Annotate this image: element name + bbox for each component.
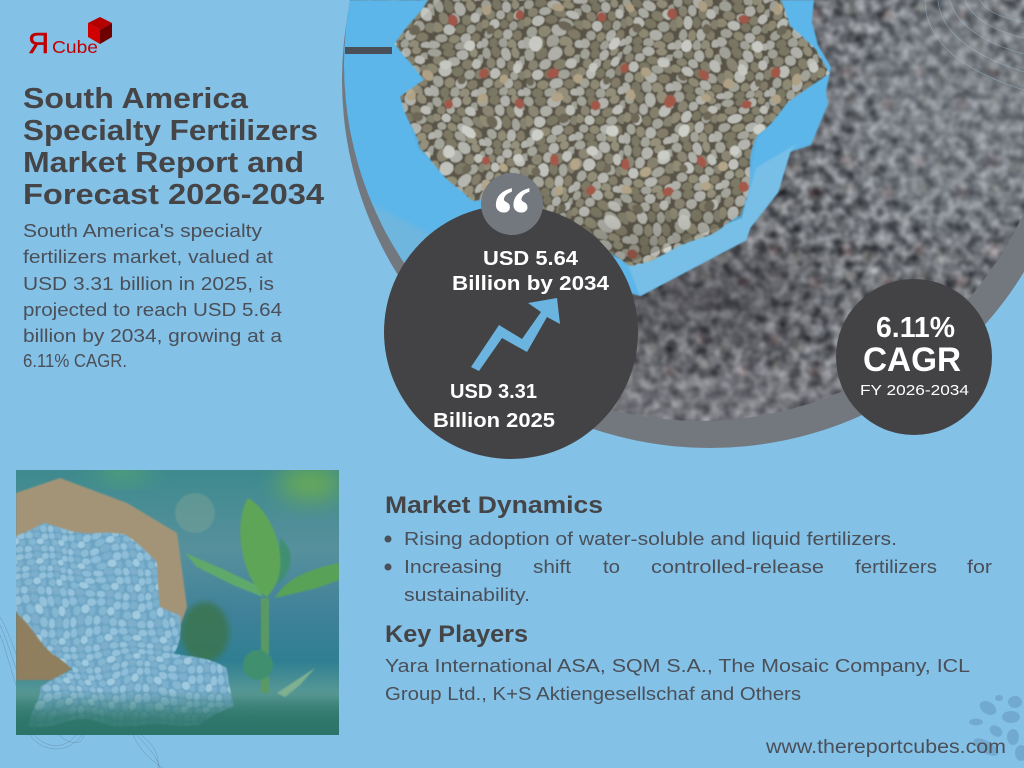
blue glove <box>330 0 831 296</box>
value 2025 <box>433 381 555 432</box>
quote badge <box>481 172 543 260</box>
blurred granules background <box>330 0 1024 440</box>
granule heap <box>397 0 828 263</box>
bullet 1: Rising adoption of water-soluble and liquid fertilizers. <box>404 529 897 549</box>
key players: Key Players <box>385 621 528 648</box>
value 2025: Billion 2025 <box>433 410 555 432</box>
decorative blobs <box>969 695 1024 761</box>
decorative contour lines <box>0 617 163 768</box>
growth arrow <box>471 298 560 371</box>
granules <box>10 518 233 725</box>
intro paragraph: fertilizers market, valued at <box>23 247 273 267</box>
intro paragraph: South America's specialty <box>23 221 262 241</box>
bullet 2: controlled-release <box>651 557 824 577</box>
CAGR circle: CAGR <box>863 341 961 379</box>
quote badge: “ <box>492 172 532 260</box>
intro paragraph: projected to reach USD 5.64 <box>23 300 282 320</box>
paper bag <box>16 477 188 626</box>
key players <box>385 621 970 704</box>
logo wordmark: Я <box>28 28 49 60</box>
intro paragraph <box>23 221 283 371</box>
market dynamics: Market Dynamics <box>385 492 603 519</box>
bullet 2: shift <box>533 557 571 577</box>
CAGR circle: 6.11% <box>876 312 955 344</box>
secondary photo: fertilizer bag and seedling <box>10 460 342 735</box>
logo word Cube: Cube <box>52 37 98 57</box>
bullet 2: fertilizers <box>855 557 937 577</box>
intro paragraph: 6.11% CAGR. <box>23 351 127 371</box>
key players: Group Ltd., K+S Aktiengesellschaf and Others <box>385 684 801 704</box>
seedling <box>185 498 339 697</box>
value 2034 <box>452 248 610 295</box>
title: Market Report and <box>23 147 304 179</box>
grass overlay <box>16 690 339 735</box>
value 2034: Billion by 2034 <box>452 273 610 295</box>
value 2025: USD 3.31 <box>450 381 537 403</box>
logo cube <box>88 17 112 44</box>
main photo: fertilizer granules in gloved hand <box>330 0 1024 440</box>
intro paragraph: billion by 2034, growing at a <box>23 326 283 346</box>
title: Forecast 2026-2034 <box>23 179 324 211</box>
value 2034: USD 5.64 <box>483 248 579 270</box>
faint contour lines top-right <box>925 0 1024 90</box>
title: South America <box>23 83 249 115</box>
bullet 2: Increasing <box>404 557 502 577</box>
website: www.thereportcubes.com <box>765 737 1006 758</box>
title: Specialty Fertilizers <box>23 115 318 147</box>
title <box>23 83 324 211</box>
market value circle <box>384 172 638 459</box>
gray ring behind photo <box>342 0 1024 448</box>
bullet 2 <box>384 557 992 605</box>
CAGR circle <box>836 279 992 435</box>
intro paragraph: USD 3.31 billion in 2025, is <box>23 274 274 294</box>
key players: Yara International ASA, SQM S.A., The Mosaic Company, ICL <box>385 656 970 676</box>
logo <box>28 17 112 60</box>
bullet 2: sustainability. <box>404 585 530 605</box>
market dynamics <box>384 492 992 605</box>
bullet 2: for <box>967 557 992 577</box>
CAGR circle: FY 2026-2034 <box>860 382 969 399</box>
bullet 2: to <box>603 557 620 577</box>
